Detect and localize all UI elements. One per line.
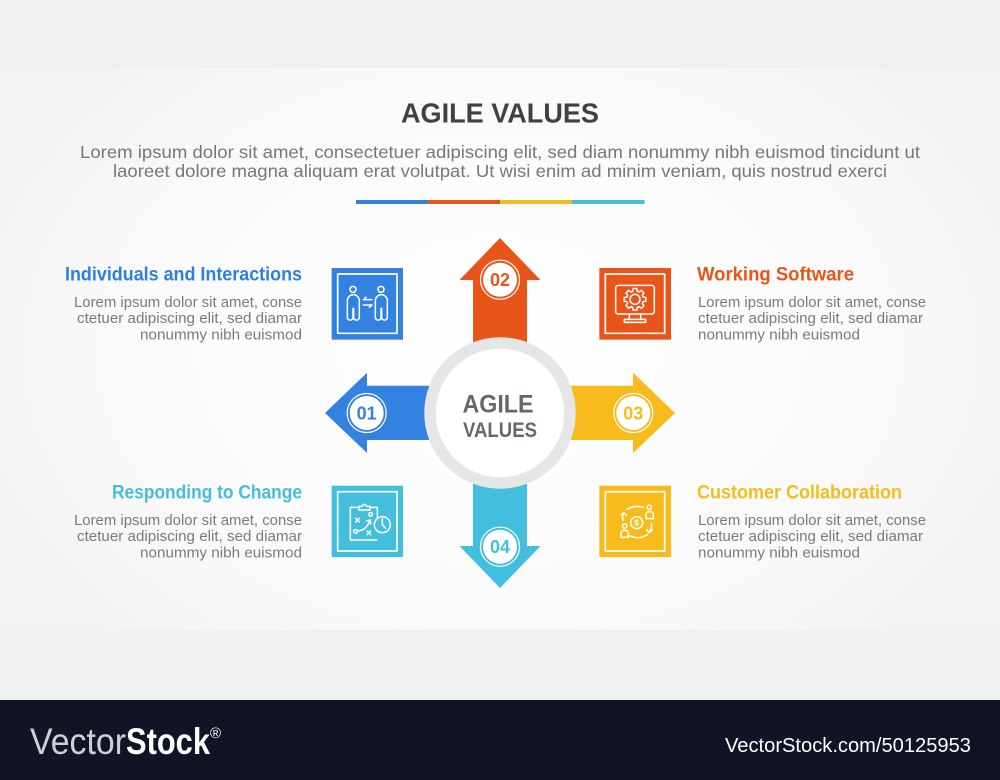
description text: Lorem ipsum dolor sit amet, consectetuer adipiscing elit, sed diam nonummy nibh euismod tincidunt ut (80, 142, 920, 162)
number badge 04 (480, 527, 520, 566)
arrow 01: left blue (325, 373, 440, 453)
watermark logo: ® (210, 725, 221, 742)
title: AGILE VALUES (401, 98, 599, 129)
text block: customer collaboration: ctetuer adipiscing elit, sed diamar (698, 528, 923, 545)
panel: individuals and interactions (65, 264, 302, 344)
heading: individuals and interactions: Individuals and Interactions (65, 264, 302, 286)
text block: working software (698, 294, 926, 344)
text block: customer collaboration: nonummy nibh euismod (698, 544, 860, 562)
watermark id: VectorStock.com/50125953 (725, 735, 971, 757)
watermark logo: Stock (126, 721, 210, 762)
center label (462, 391, 537, 442)
arrow 03: right yellow (560, 373, 675, 453)
text block: working software: ctetuer adipiscing elit, sed diamar (698, 310, 923, 327)
number badge 04: 04 (490, 537, 510, 557)
watermark logo: Vector (30, 721, 126, 762)
text block: customer collaboration: Lorem ipsum dolor sit amet, conse (698, 512, 926, 529)
number badge 02: 02 (490, 270, 510, 290)
watermark logo (30, 721, 221, 762)
heading: working software: Working Software (697, 264, 854, 286)
text block: individuals: Lorem ipsum dolor sit amet, conse (74, 294, 302, 311)
footer band (0, 700, 1000, 780)
panel: responding to change (74, 482, 302, 562)
icon: monitor with gear (599, 268, 671, 340)
arrow 04: down cyan (460, 480, 540, 588)
center label: VALUES (463, 418, 537, 442)
description text (80, 142, 920, 181)
text block: working software: Lorem ipsum dolor sit amet, conse (698, 294, 926, 311)
text block: responding to change: nonummy nibh euismod (140, 544, 302, 562)
description text: laoreet dolore magna aliquam erat volutpat. Ut wisi enim ad minim veniam, quis nostrud exerci (113, 161, 887, 181)
text block: working software: nonummy nibh euismod (698, 326, 860, 344)
number badge 01 (347, 394, 386, 432)
number badge 03: 03 (623, 404, 643, 424)
number badge 03 (614, 394, 653, 432)
text block: responding to change (74, 512, 302, 562)
panel: customer collaboration (697, 482, 926, 562)
central circle (430, 343, 570, 483)
title divider: four colour bar (356, 200, 644, 204)
text block: responding to change: ctetuer adipiscing elit, sed diamar (77, 528, 302, 545)
arrow 02: up orange (460, 238, 540, 350)
icon: customer exchange with dollar: $ (634, 518, 639, 528)
heading: customer collaboration: Customer Collaboration (697, 482, 902, 504)
panel: working software (697, 264, 926, 344)
text block: individuals: ctetuer adipiscing elit, sed diamar (77, 310, 302, 327)
text block: individuals: nonummy nibh euismod (140, 326, 302, 344)
icon: customer exchange with dollar (599, 486, 671, 557)
icon: clipboard strategy with clock (332, 486, 403, 557)
text block: individuals (74, 294, 302, 344)
text block: customer collaboration (698, 512, 926, 562)
heading: responding to change: Responding to Change (112, 482, 302, 504)
center label: AGILE (462, 391, 534, 419)
icon: people exchanging (332, 268, 403, 340)
text block: responding to change: Lorem ipsum dolor sit amet, conse (74, 512, 302, 529)
number badge 02 (480, 260, 520, 299)
number badge 01: 01 (357, 404, 377, 424)
